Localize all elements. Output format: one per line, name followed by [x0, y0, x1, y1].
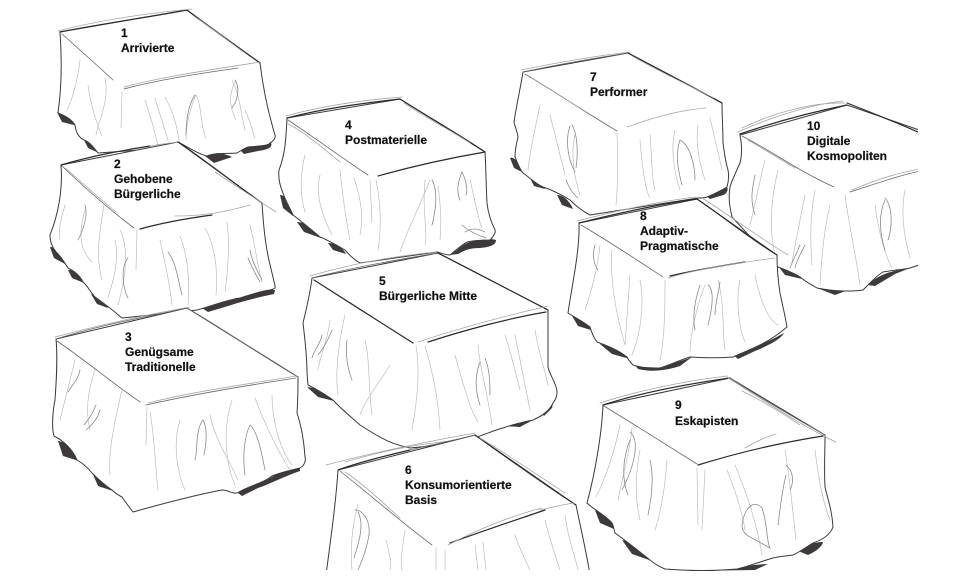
label 6: Basis	[405, 493, 437, 507]
shadow patches of table 8	[572, 316, 784, 371]
label 5: 5	[379, 274, 386, 288]
label 7: Performer	[590, 85, 648, 99]
label 2: Gehobene	[114, 172, 173, 186]
table 5: Bürgerliche Mitte	[303, 252, 557, 448]
label 9: 9	[675, 398, 682, 412]
label 6: Konsumorientierte	[405, 478, 512, 492]
table 10: Digitale Kosmopoliten	[729, 101, 925, 295]
label 1: Arrivierte	[121, 41, 175, 55]
table 7: Performer	[510, 52, 729, 215]
label 4: Postmaterielle	[345, 133, 427, 147]
shadow patches of table 2	[50, 247, 275, 312]
shadow patches of table 5	[307, 387, 553, 430]
label 8: Pragmatische	[640, 239, 719, 253]
table 1: Arrivierte	[57, 9, 275, 163]
table 9: Eskapisten	[587, 376, 836, 571]
label 10: Digitale	[807, 134, 851, 148]
label 8: Adaptiv-	[640, 224, 688, 238]
label 6: 6	[405, 463, 412, 477]
shadow patches of table 9	[595, 510, 823, 571]
table 8: Adaptiv-Pragmatische	[568, 197, 788, 371]
label 7: 7	[590, 70, 597, 84]
shadow patches of table 3	[58, 441, 300, 496]
label 9: Eskapisten	[675, 414, 738, 428]
label 10: Kosmopoliten	[807, 149, 887, 163]
shadow patches of table 1	[57, 112, 271, 163]
label 2: Bürgerliche	[114, 187, 181, 201]
label 3: Traditionelle	[125, 360, 196, 374]
label 4: 4	[345, 118, 352, 132]
label 2: 2	[114, 157, 121, 171]
label 3: Genügsame	[125, 345, 194, 359]
shadow patches of table 10	[778, 266, 910, 295]
label 3: 3	[125, 330, 132, 344]
table 2: Gehobene Bürgerliche	[50, 142, 276, 318]
shadow patches of table 4	[280, 195, 496, 255]
label 8: 8	[640, 209, 647, 223]
shadow patches of table 7	[510, 158, 728, 209]
label 5: Bürgerliche Mitte	[379, 289, 477, 303]
table 6: Konsumorientierte Basis	[326, 433, 590, 575]
table 4: Postmaterielle	[279, 97, 496, 263]
label 1: 1	[121, 26, 128, 40]
table 3: Genügsame Traditionelle	[53, 307, 305, 512]
label 10: 10	[807, 119, 820, 133]
